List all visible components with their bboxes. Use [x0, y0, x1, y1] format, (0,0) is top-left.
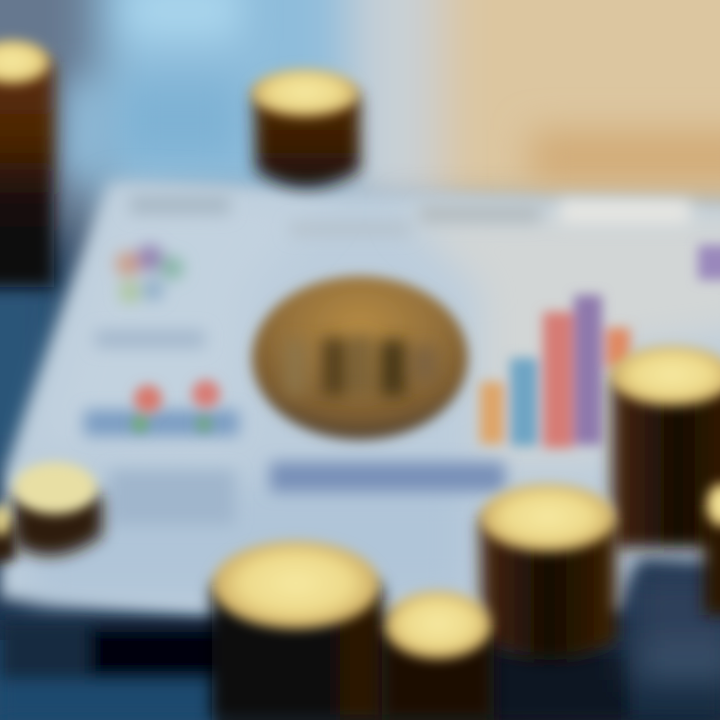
coin stack: right	[610, 346, 720, 548]
coin stack: bottom small	[382, 591, 494, 720]
pie chart cluster	[116, 245, 183, 302]
table area, lower right	[630, 570, 720, 680]
central gold coin	[252, 276, 468, 440]
coin stack: bottom centre	[212, 541, 384, 720]
coin stack: lower right	[480, 484, 616, 660]
dark bottom band	[0, 620, 720, 720]
document paper	[0, 182, 720, 618]
blue text band	[84, 410, 505, 492]
light blue backdrop highlights	[66, 0, 720, 185]
coin stack: far right edge	[704, 483, 720, 615]
bar chart	[480, 245, 720, 448]
paper shading	[30, 190, 720, 600]
coin stack: top centre	[251, 69, 360, 188]
small bar cluster	[132, 380, 220, 432]
paper text smudges	[95, 195, 690, 525]
coin stack: top left edge	[0, 40, 54, 287]
coin stack: left small	[0, 462, 102, 565]
